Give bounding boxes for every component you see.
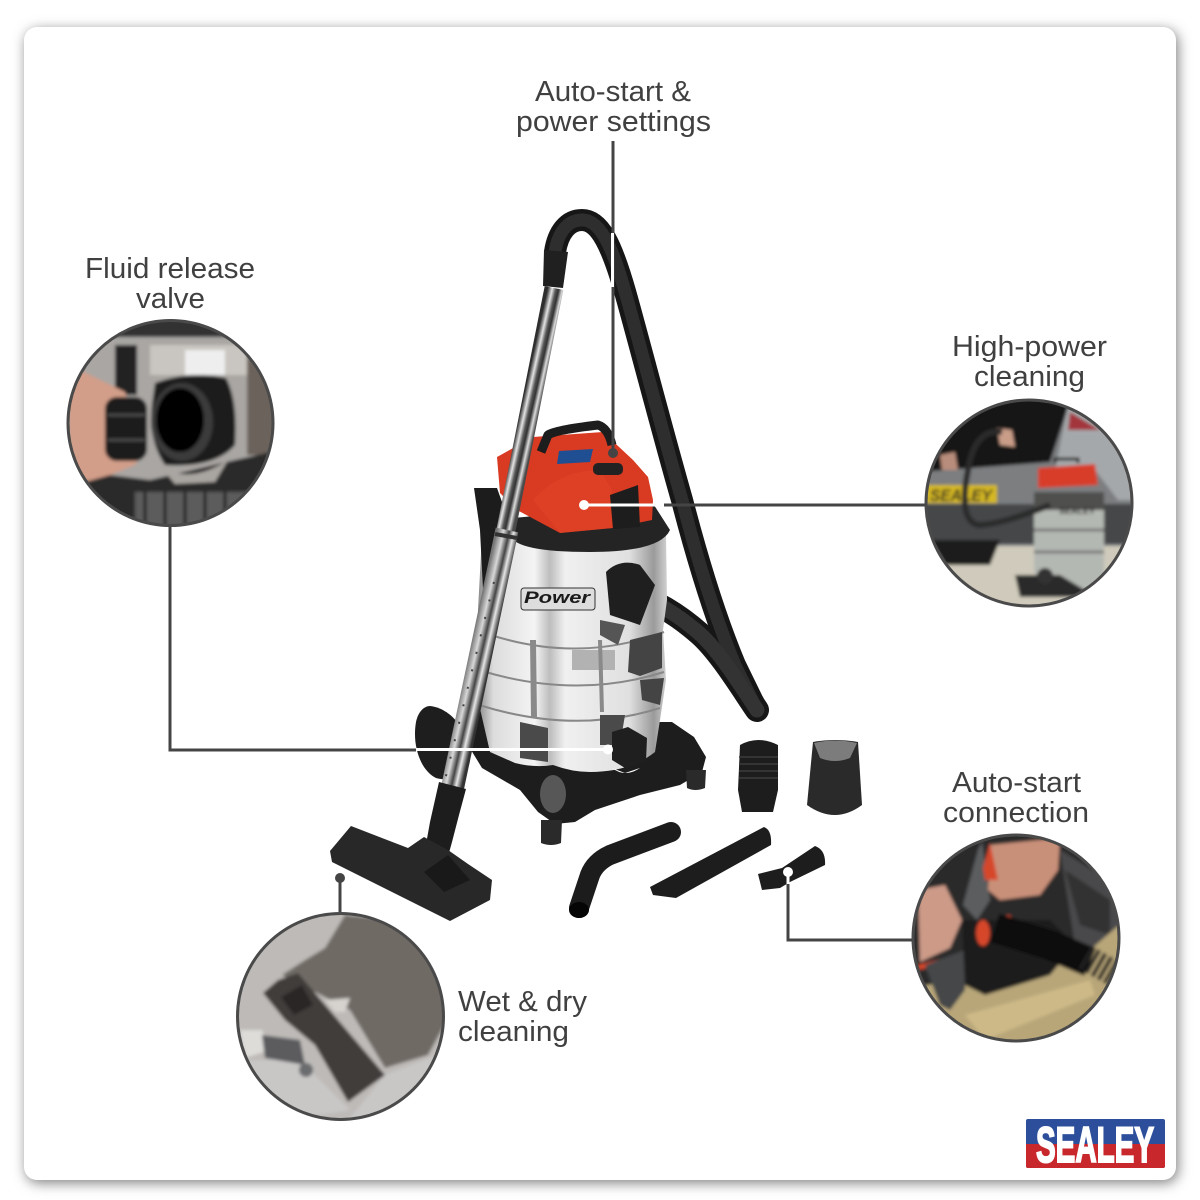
tank inlet: [606, 563, 655, 625]
label: wet and dry cleaning: cleaning: [458, 1016, 569, 1048]
hose: [555, 220, 757, 710]
plate text: SEALEY: [930, 486, 994, 505]
photo: auto-start connection: [905, 830, 1125, 1050]
socket: [610, 485, 640, 529]
label: high-power cleaning: High-power: [952, 331, 1107, 363]
line: wet and dry cleaning: [335, 873, 345, 912]
callout lines and markers: [335, 141, 925, 940]
wand: [442, 288, 554, 795]
label: auto-start connection: Auto-start: [952, 767, 1081, 799]
caster well: [540, 775, 566, 813]
accessory: small nozzle: [758, 846, 825, 890]
label: auto-start and power settings: Auto-start &: [535, 76, 691, 108]
drain knob: [612, 727, 647, 773]
accessory: crevice tool: [650, 827, 771, 898]
line: fluid release valve marker: [416, 744, 613, 754]
bent tube opening: [569, 902, 589, 918]
Power Clean badge: Power: [524, 588, 592, 607]
red head: [497, 432, 653, 533]
accessory: bent tube: [579, 832, 671, 908]
line: auto-start power settings: [608, 141, 618, 458]
floor head neck: [425, 782, 466, 860]
base: [468, 708, 706, 824]
casters: [541, 770, 706, 845]
black rim: [510, 505, 670, 552]
label: high-power cleaning: cleaning: [974, 361, 1085, 393]
vacuum cleaner product: [330, 220, 757, 921]
hose cuff: [543, 250, 568, 288]
line: auto-start connection: [783, 867, 912, 940]
line: high-power cleaning: [579, 500, 925, 510]
accessories: [569, 740, 862, 918]
floor head: [330, 826, 492, 921]
label: fluid release valve: Fluid release: [85, 253, 255, 285]
photo: wet and dry cleaning: [236, 912, 445, 1121]
power switch: [593, 463, 623, 475]
foam filter top: [814, 740, 857, 761]
accessory: hose adaptor: [738, 740, 778, 812]
blue sticker: [557, 449, 593, 464]
accessory: foam filter: [807, 740, 862, 815]
rear bracket: [474, 488, 512, 610]
label: fluid release valve: valve: [136, 283, 205, 315]
stainless tank: [478, 535, 667, 772]
Power Clean badge: [521, 588, 595, 610]
photo: high-power cleaning: [920, 395, 1140, 615]
photo: fluid release valve: [66, 319, 274, 527]
label: wet and dry cleaning: Wet & dry: [458, 986, 588, 1018]
head handle: [541, 425, 612, 452]
connector line: fluid release valve: [170, 527, 416, 750]
label: auto-start connection: connection: [943, 797, 1089, 829]
label: auto-start and power settings: power settings: [516, 106, 711, 138]
tank reflections: [479, 620, 664, 762]
mini vacuum label: SEALEY: [1059, 506, 1095, 516]
wheel left: [415, 706, 470, 779]
